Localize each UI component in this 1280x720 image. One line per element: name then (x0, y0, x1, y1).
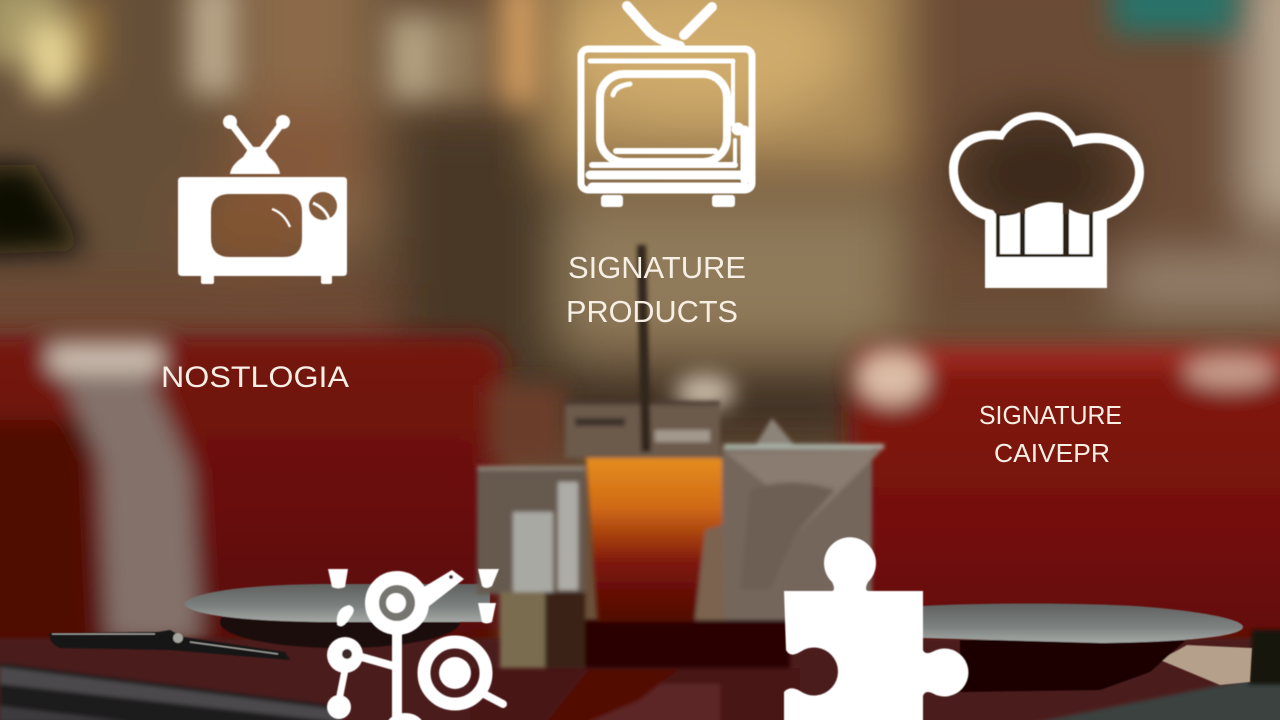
label: SIGNATURE PRODUCTS (566, 250, 746, 329)
left water glass (477, 466, 585, 668)
hat pleats (1000, 202, 1089, 254)
orange drink glass (565, 401, 725, 622)
napkin holder (722, 418, 884, 620)
hat outline (949, 112, 1144, 288)
icon: outlined retro TV, center (581, 6, 752, 206)
background: blurred wall (0, 0, 1280, 440)
background: blurred lights (0, 0, 1237, 255)
hat panels backing (996, 214, 1093, 258)
dark tray (545, 620, 790, 668)
knife (50, 630, 290, 660)
icon: gears and nodes, bottom left (327, 569, 503, 720)
label: SIGNATURE PRODUCTS: PRODUCTS (566, 294, 738, 329)
label: SIGNATURE CAIVEPR: SIGNATURE (979, 400, 1122, 430)
label: NOSTLOGIA: NOSTLOGIA (161, 361, 349, 394)
icon: puzzle piece, bottom right (784, 537, 968, 720)
left plate (184, 584, 490, 648)
icon: small retro TV, left (178, 115, 347, 284)
icon: chef hat, right (949, 112, 1144, 288)
plates and knife (50, 584, 1252, 692)
straw (637, 245, 651, 452)
label: SIGNATURE CAIVEPR: CAIVEPR (994, 438, 1110, 468)
label: SIGNATURE PRODUCTS: SIGNATURE (568, 250, 746, 285)
background: red booth seats (0, 335, 1280, 665)
right plate (922, 604, 1243, 692)
drinks on table (477, 245, 884, 668)
label: SIGNATURE CAIVEPR (979, 400, 1122, 468)
napkin under right plate (1160, 645, 1252, 685)
background: table top (0, 630, 1280, 720)
